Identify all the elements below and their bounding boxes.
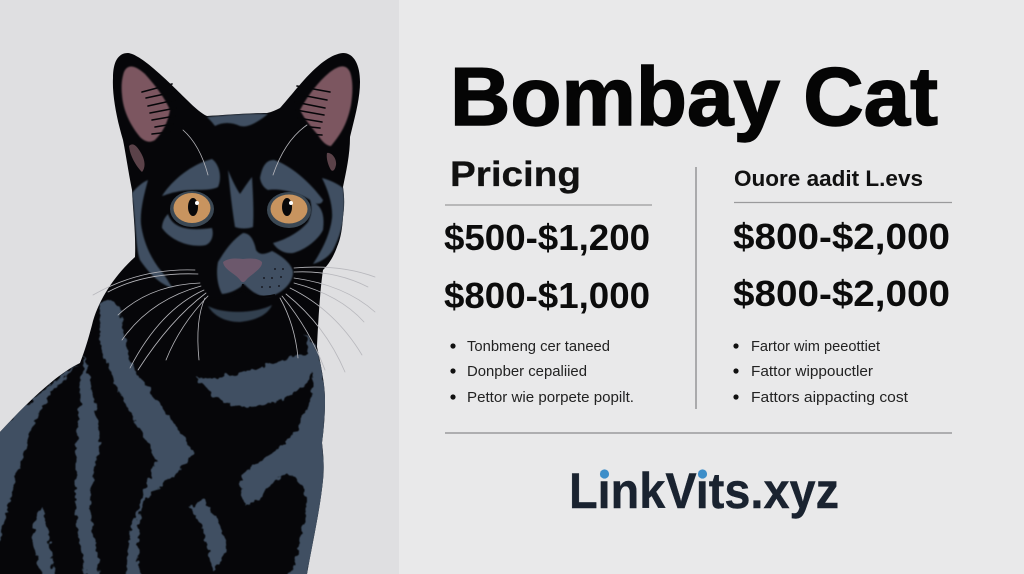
heading: pricing column: Pricing <box>450 155 581 194</box>
muzzle <box>217 233 293 297</box>
prices: right column: $800-$2,000 <box>733 216 950 257</box>
bullet list: left column <box>450 338 634 406</box>
right brow arc <box>260 160 323 204</box>
right eye <box>267 192 311 228</box>
prices: left column <box>444 217 650 316</box>
bullet list: left column: Donpber cepaliied <box>467 363 587 380</box>
bullet list: right column: Fattors aippacting cost <box>751 389 909 406</box>
title: Bombay Cat <box>450 50 938 143</box>
prices: left column: $800-$1,000 <box>444 275 650 316</box>
blue dots on the letters i <box>600 469 707 479</box>
prices: right column <box>733 216 950 314</box>
left ear fur streaks <box>142 84 176 134</box>
chin <box>208 305 272 322</box>
front leg highlight <box>190 500 227 572</box>
left eye <box>170 191 214 227</box>
shoulder stripe <box>75 355 101 574</box>
prices: right column: $800-$2,000 <box>733 273 950 314</box>
chest band <box>197 350 316 407</box>
left flank <box>0 366 78 542</box>
bullet list: left column: Pettor wie porpete popilt. <box>467 389 634 406</box>
muzzle dots <box>261 268 284 288</box>
right ear fur streaks <box>295 86 330 135</box>
bullet list: right column: Fattor wippouctler <box>751 363 873 380</box>
dividers <box>445 167 952 433</box>
panel: left background <box>0 0 399 574</box>
bullet list: right column <box>733 338 909 406</box>
right ear inner <box>300 66 352 146</box>
left ear inner <box>122 66 170 142</box>
body fur highlights <box>0 301 326 574</box>
nose bridge <box>228 170 253 228</box>
bullet list: right column: Fartor wim peeottiet <box>751 338 881 355</box>
forehead <box>207 114 268 126</box>
left haunch highlight <box>33 507 54 574</box>
nose <box>223 258 262 282</box>
ear base folds <box>129 144 336 172</box>
whiskers <box>93 125 375 372</box>
right cheek <box>313 178 344 264</box>
brand logo text: LinkVits.xyz <box>569 463 839 519</box>
right side <box>239 333 326 574</box>
left cheek <box>132 180 173 288</box>
illustration: black Bombay cat <box>0 53 375 574</box>
heading: right column: Ouore aadit L.evs <box>734 166 923 191</box>
right eye outer band and lower crescent <box>273 200 324 253</box>
mouth line <box>208 284 275 299</box>
left brow arc <box>162 159 220 196</box>
neck stripe <box>100 301 193 574</box>
panel: right background <box>399 0 1024 574</box>
bullet list: left column: Tonbmeng cer taneed <box>467 338 610 355</box>
prices: left column: $500-$1,200 <box>444 217 650 258</box>
left under-eye crescent <box>162 214 213 246</box>
cat silhouette <box>0 53 360 574</box>
face highlights <box>132 114 344 322</box>
